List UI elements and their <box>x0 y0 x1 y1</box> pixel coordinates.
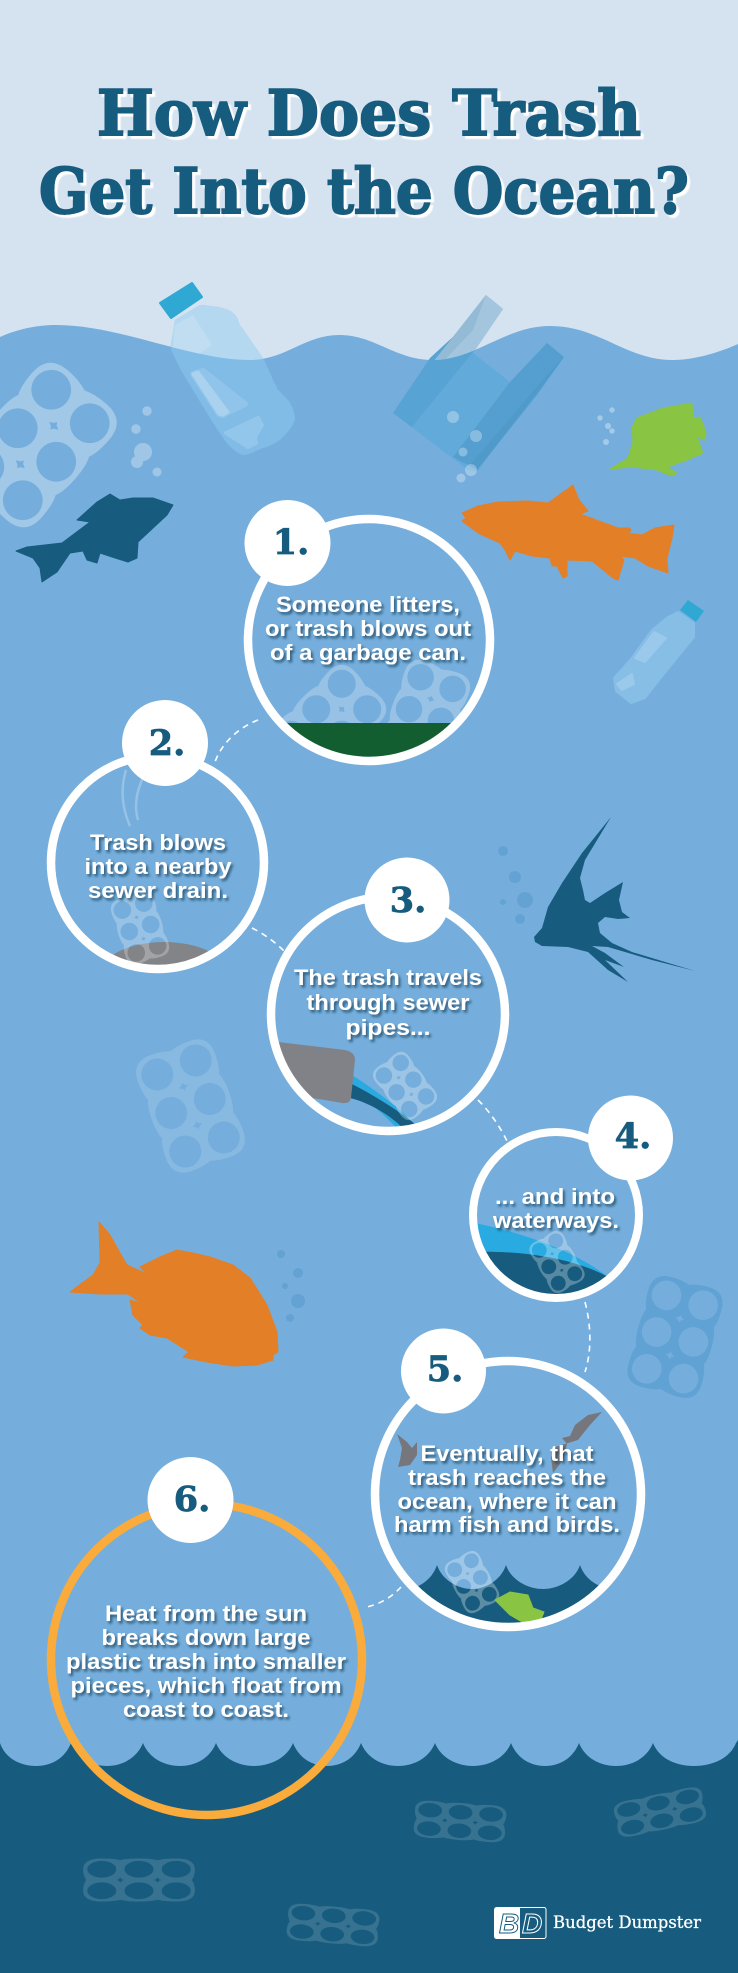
step 1 number: 1. <box>273 522 309 563</box>
step 1 text: of a garbage can. <box>270 640 466 665</box>
icon: orange trout <box>462 485 674 580</box>
icon: green fish <box>610 403 706 476</box>
step 6 number: 6. <box>174 1479 210 1520</box>
step 5 text: Eventually, that <box>420 1441 594 1466</box>
logo wordmark: Budget Dumpster <box>553 1913 702 1933</box>
step 6 text: coast to coast. <box>123 1697 289 1722</box>
six-pack ring: ocean floor 3 <box>83 1858 195 1902</box>
step 2 number: 2. <box>149 723 185 764</box>
step 4 scene <box>478 1224 606 1294</box>
step 1 ring <box>248 519 490 761</box>
icon: large bird <box>551 1412 602 1473</box>
step 2 text <box>84 830 232 903</box>
logo mark: B <box>499 1908 519 1939</box>
icon: plastic bag <box>393 295 564 472</box>
six-pack ring: middle left <box>131 1034 250 1178</box>
step 3 number: 3. <box>390 880 426 921</box>
step 6 text: plastic trash into smaller <box>66 1649 346 1674</box>
six-pack ring: ocean floor 1 <box>413 1800 507 1843</box>
dashed connector 1 to 2 <box>215 720 258 762</box>
bubbles near angelfish <box>498 846 533 924</box>
step 5 text: trash reaches the <box>408 1465 606 1490</box>
step 3 text: pipes... <box>346 1015 430 1040</box>
dashed connector 5 to 6 <box>367 1587 401 1607</box>
step 5 text: harm fish and birds. <box>394 1512 620 1537</box>
step 4 badge <box>588 1096 673 1180</box>
icon: small plastic bottle <box>614 600 704 703</box>
six-pack ring: middle right <box>624 1272 726 1402</box>
icon: large orange fish <box>70 1222 278 1366</box>
logo mark <box>494 1907 546 1939</box>
dark ocean floor <box>0 1740 738 1973</box>
step 6 badge <box>148 1457 234 1543</box>
step 5 scene <box>418 1550 598 1623</box>
step 4 text <box>492 1184 619 1233</box>
logo: Budget Dumpster <box>494 1907 702 1939</box>
step 1 text <box>265 592 472 665</box>
icon: small bird <box>397 1434 417 1467</box>
logo mark: D <box>522 1908 542 1939</box>
step 3 ring <box>271 897 505 1131</box>
panel: step 1 <box>244 500 494 766</box>
step 2 text: into a nearby <box>84 854 232 879</box>
title: Get Into the Ocean? <box>39 154 689 228</box>
six-pack ring: ocean floor 2 <box>612 1785 708 1839</box>
step 6 text: breaks down large <box>102 1625 310 1650</box>
icon: angelfish <box>534 817 695 982</box>
dashed connector 3 to 4 <box>478 1100 507 1141</box>
step 4 text: waterways. <box>492 1208 619 1233</box>
panel: step 6 <box>51 1457 362 1815</box>
step 3 text: through sewer <box>306 990 470 1015</box>
dashed connector 2 to 3 <box>252 928 284 951</box>
panel: step 5 <box>372 1328 650 1640</box>
panel: step 2 <box>51 700 264 1002</box>
step 6 text <box>66 1601 346 1722</box>
step 2 scene <box>110 770 208 965</box>
step 3 scene <box>278 1042 437 1126</box>
step 4 text: ... and into <box>495 1184 615 1209</box>
six-pack ring: top left <box>0 354 126 536</box>
step 6 text: Heat from the sun <box>105 1601 307 1626</box>
bubbles near green fish <box>597 407 615 445</box>
panel: step 3 <box>270 858 505 1132</box>
step 5 ring <box>375 1361 641 1627</box>
step 5 text: ocean, where it can <box>398 1489 616 1514</box>
icon: dark blue fish <box>16 494 173 582</box>
step 4 ring <box>473 1132 639 1298</box>
step 4 number: 4. <box>615 1116 651 1157</box>
step 3 text <box>294 965 482 1040</box>
icon: large plastic bottle <box>160 283 295 455</box>
step 2 ring <box>51 756 264 969</box>
step 2 text: sewer drain. <box>88 878 228 903</box>
step 6 ring <box>51 1504 362 1815</box>
bubbles near orange fish <box>277 1250 305 1322</box>
dashed connector 4 to 5 <box>585 1302 590 1372</box>
step 1 text: Someone litters, <box>276 592 460 617</box>
step 1 scene <box>282 660 470 757</box>
step 3 text: The trash travels <box>294 965 482 990</box>
bubbles on plastic bag <box>447 411 482 482</box>
step 1 badge <box>244 500 330 586</box>
step 1 text: or trash blows out <box>265 616 472 641</box>
step 6 text: pieces, which float from <box>70 1673 342 1698</box>
six-pack ring: ocean floor 4 <box>286 1903 380 1947</box>
step 2 badge <box>122 700 208 786</box>
step 5 badge <box>401 1328 486 1414</box>
step 5 number: 5. <box>427 1349 463 1390</box>
panel: step 4 <box>470 1096 673 1310</box>
step 2 text: Trash blows <box>90 830 226 855</box>
step 5 text <box>394 1441 620 1537</box>
title <box>39 76 689 228</box>
bubbles near top-left rings <box>131 406 162 476</box>
title: How Does Trash <box>97 76 641 150</box>
step 3 badge <box>364 858 450 942</box>
